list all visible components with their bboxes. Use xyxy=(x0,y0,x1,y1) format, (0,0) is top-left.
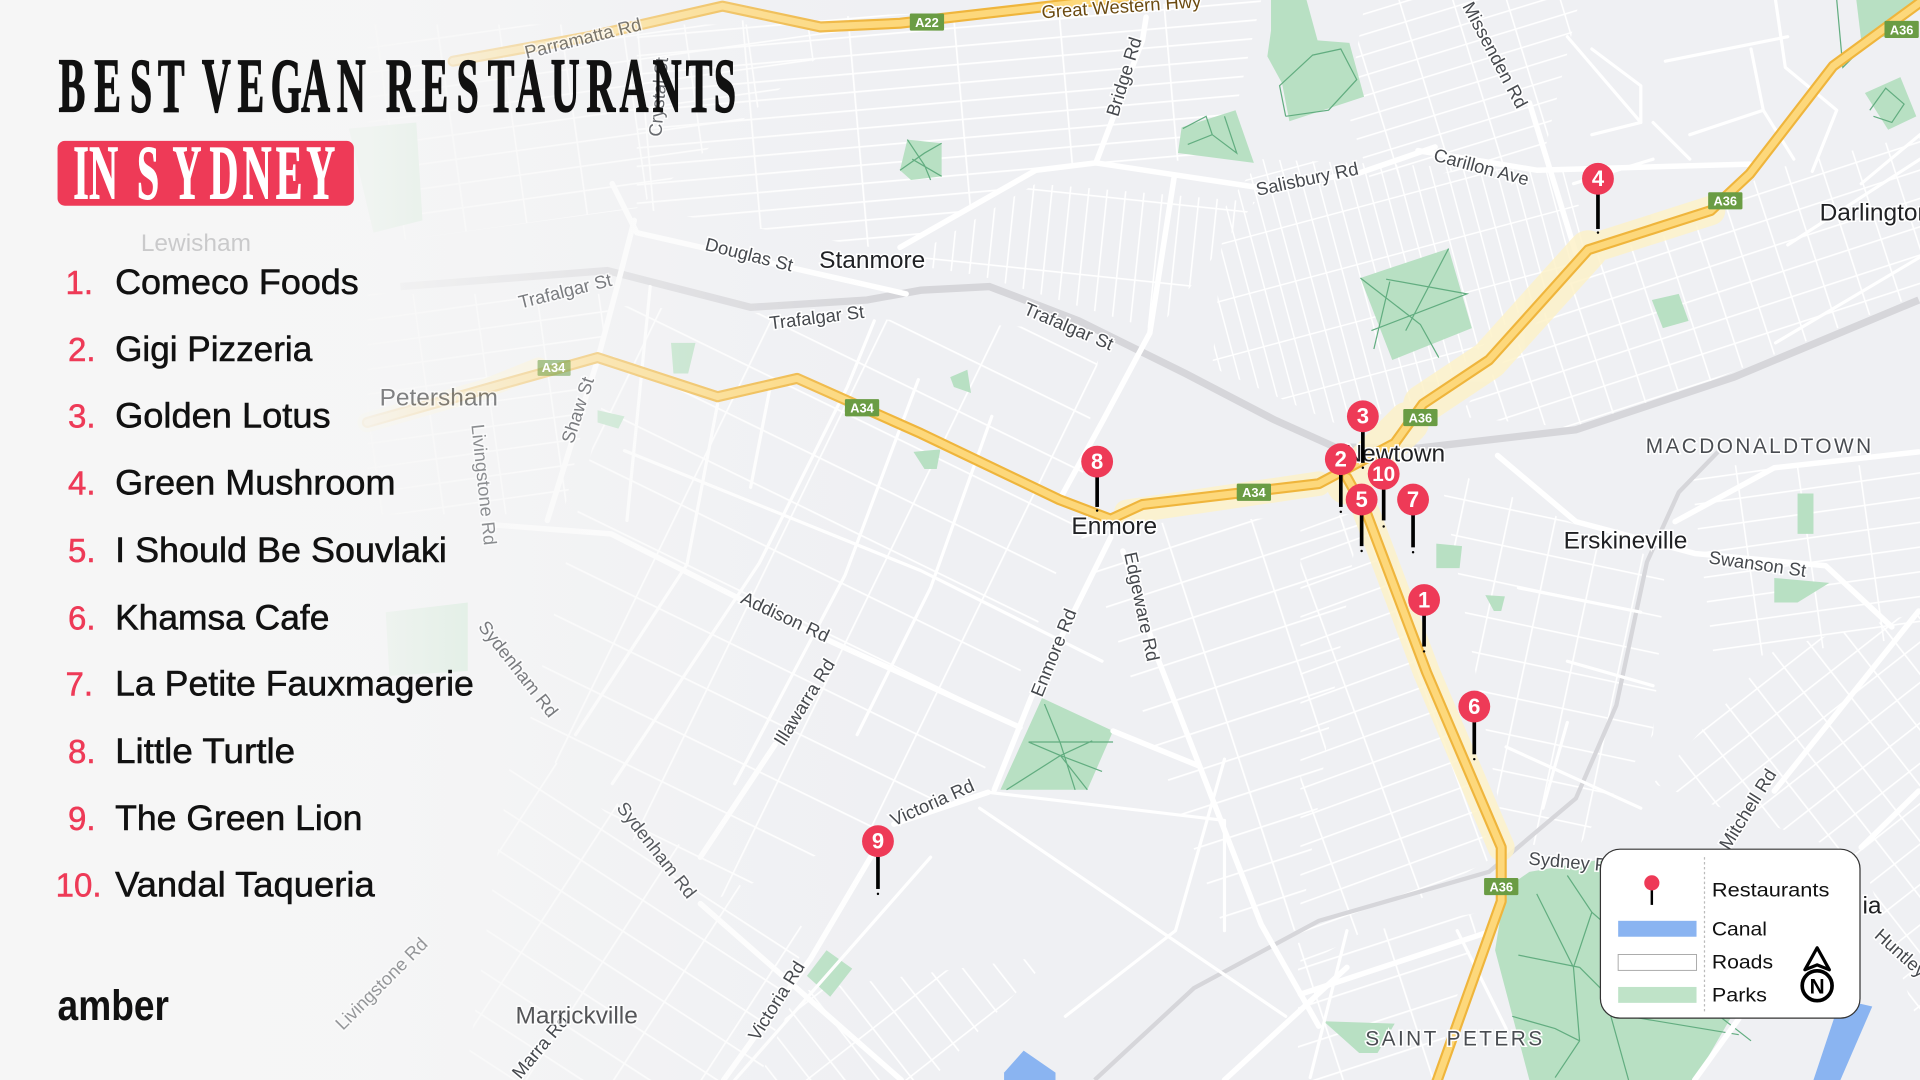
map labels: Lewisham xyxy=(141,230,251,257)
restaurant list: 7. xyxy=(65,667,93,704)
subtitle badge: IN SYDNEY xyxy=(73,131,335,216)
highway shields: A22 xyxy=(915,15,939,30)
map labels: Livingstone Rd xyxy=(467,423,501,546)
map labels: ia xyxy=(1862,892,1882,919)
title: BEST VEGAN RESTAURANTS xyxy=(59,44,736,129)
map labels: Sydenham Rd xyxy=(474,616,563,721)
map labels: Erskineville xyxy=(1564,528,1687,555)
left fade overlay xyxy=(0,0,882,1080)
restaurant list: Vandal Taqueria xyxy=(115,864,375,904)
map labels: Newtown xyxy=(1344,441,1445,468)
park paths xyxy=(900,0,1904,1080)
pin 9 xyxy=(862,825,894,895)
map labels: Stanmore xyxy=(819,247,925,274)
map labels: Salisbury Rd xyxy=(1254,158,1360,200)
map labels: Livingstone Rd xyxy=(331,933,432,1034)
highway shields: A36 xyxy=(1489,879,1513,894)
highway shields: A34 xyxy=(542,360,566,375)
restaurant list: 6. xyxy=(68,600,96,637)
map labels: Petersham xyxy=(380,384,498,411)
restaurant list: Little Turtle xyxy=(115,731,295,771)
map labels: Illawarra Rd xyxy=(769,655,839,749)
pin 8: 8 xyxy=(1091,449,1103,474)
map labels: Parramatta Rd xyxy=(522,13,643,63)
highway shields: A34 xyxy=(850,401,875,416)
pin 2: 2 xyxy=(1335,447,1347,472)
roads swatch xyxy=(1618,954,1697,970)
restaurant list: 8. xyxy=(68,734,96,771)
pin 4 xyxy=(1582,163,1614,234)
map labels: Missenden Rd xyxy=(1459,0,1532,112)
map labels: Crystal St xyxy=(644,56,672,137)
restaurant list: 5. xyxy=(68,533,96,570)
pin 4: 4 xyxy=(1592,166,1605,191)
pin 5: 5 xyxy=(1355,487,1368,512)
restaurant list: Comeco Foods xyxy=(115,262,359,302)
map labels: Trafalgar St xyxy=(768,301,865,333)
restaurant list: 10. xyxy=(56,867,102,904)
highway shields: A36 xyxy=(1714,194,1737,209)
map labels: Marrickville xyxy=(516,1003,638,1030)
pin 7 xyxy=(1397,484,1429,553)
restaurant list: 3. xyxy=(68,398,96,435)
map labels: Addison Rd xyxy=(738,587,833,646)
pin 5 xyxy=(1346,484,1378,552)
map labels: Edgeware Rd xyxy=(1120,550,1164,663)
pin 9: 9 xyxy=(872,829,884,854)
map labels: Enmore xyxy=(1071,513,1157,540)
pin 3: 3 xyxy=(1357,404,1369,429)
restaurant list: Khamsa Cafe xyxy=(115,597,329,637)
map labels: Sydney Park xyxy=(1528,848,1634,878)
north arrow: N xyxy=(1810,976,1825,999)
map labels: Enmore Rd xyxy=(1026,605,1081,699)
highway shields: A36 xyxy=(1890,22,1913,37)
canal and water xyxy=(1004,999,1872,1080)
legend pin icon xyxy=(1644,875,1659,905)
pin 1 xyxy=(1408,584,1440,653)
restaurant list: I Should Be Souvlaki xyxy=(115,530,447,570)
highway shields: A34 xyxy=(1242,485,1267,500)
map pins xyxy=(862,163,1614,895)
map labels: Carillon Ave xyxy=(1432,144,1531,190)
pin 1: 1 xyxy=(1418,587,1430,612)
railway lines xyxy=(400,271,1919,1080)
legend labels: Parks xyxy=(1712,985,1767,1007)
restaurant list: 9. xyxy=(68,801,96,838)
map labels: Trafalgar St xyxy=(1021,298,1117,354)
pin 6: 6 xyxy=(1468,694,1480,719)
pin 6 xyxy=(1458,691,1490,760)
highway shields: A36 xyxy=(1409,410,1432,425)
map labels: Mitchell Rd xyxy=(1715,765,1780,853)
main streets xyxy=(484,17,1919,1080)
highway shields xyxy=(538,13,1919,895)
legend labels xyxy=(1712,879,1830,1007)
canal swatch xyxy=(1618,921,1697,937)
pin 10: 10 xyxy=(1372,463,1395,486)
map labels: Douglas St xyxy=(703,233,795,275)
map labels: Swanson St xyxy=(1708,546,1808,581)
pin 7: 7 xyxy=(1407,487,1419,512)
legend labels: Roads xyxy=(1712,952,1773,974)
restaurant list: Gigi Pizzeria xyxy=(115,329,312,369)
map labels: MACDONALDTOWN xyxy=(1646,435,1874,458)
legend labels: Canal xyxy=(1712,919,1767,941)
pin 3 xyxy=(1347,400,1379,469)
restaurant list: The Green Lion xyxy=(115,798,362,838)
north arrow xyxy=(1802,948,1832,1001)
map labels: Trafalgar St xyxy=(516,269,614,312)
secondary streets xyxy=(576,0,1920,1080)
restaurant list: Green Mushroom xyxy=(115,463,396,503)
legend xyxy=(1600,849,1860,1018)
pin 10 xyxy=(1368,458,1400,528)
restaurant list: 4. xyxy=(68,466,96,503)
pin 2 xyxy=(1325,443,1357,513)
map labels: SAINT PETERS xyxy=(1365,1028,1545,1051)
map labels: Victoria Rd xyxy=(744,957,809,1044)
legend labels: Restaurants xyxy=(1712,879,1830,901)
restaurant list: Golden Lotus xyxy=(115,395,331,435)
map labels: Sydenham Rd xyxy=(613,798,701,902)
pin 8 xyxy=(1081,446,1113,512)
map labels: Shaw St xyxy=(557,374,598,446)
map labels: Bridge Rd xyxy=(1102,35,1146,119)
restaurant list: 2. xyxy=(68,332,96,369)
parks swatch xyxy=(1618,987,1697,1003)
map labels: Victoria Rd xyxy=(887,775,977,830)
logo: amber: amber xyxy=(58,982,169,1030)
restaurant list xyxy=(56,262,474,904)
restaurant list: La Petite Fauxmagerie xyxy=(115,664,474,704)
restaurant list: 1. xyxy=(65,265,93,302)
